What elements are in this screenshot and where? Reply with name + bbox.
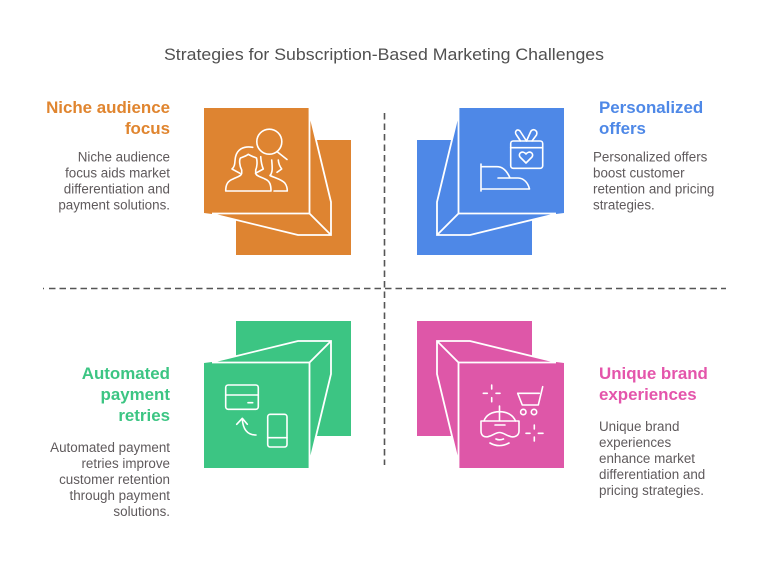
body text: differentiation and xyxy=(599,467,705,482)
body text: pricing strategies. xyxy=(599,483,704,498)
icon: VR headset with cart xyxy=(481,385,543,446)
vertical dashed divider xyxy=(384,113,386,465)
icon: hand with gift xyxy=(481,130,543,191)
panel: automated payment retries xyxy=(50,321,351,519)
heading: offers xyxy=(599,119,646,138)
heading: retries xyxy=(118,406,170,425)
body text: differentiation and xyxy=(64,182,170,196)
panel: niche audience focus xyxy=(46,98,351,255)
graphic: blue fold block xyxy=(417,108,564,255)
title: Strategies for Subscription-Based Marketing Challenges xyxy=(164,45,604,64)
heading: experiences xyxy=(599,385,697,404)
body text: Unique brand xyxy=(599,419,679,434)
heading: payment xyxy=(101,385,170,404)
body text: solutions. xyxy=(113,504,170,519)
body text: customer retention xyxy=(59,472,170,487)
horizontal dashed divider xyxy=(43,288,726,290)
heading: Personalized xyxy=(599,98,703,117)
heading: Niche audience xyxy=(46,98,170,117)
body text: retries improve xyxy=(81,456,170,471)
heading: Automated xyxy=(82,364,170,383)
body text: payment solutions. xyxy=(58,198,170,212)
body text: through payment xyxy=(70,488,170,503)
panel: unique brand experiences xyxy=(417,321,708,498)
heading: Unique brand xyxy=(599,364,708,383)
body text: Personalized offers xyxy=(593,150,708,164)
body text: focus aids market xyxy=(65,166,170,180)
icon: card, arrow and phone xyxy=(226,385,287,447)
graphic: green fold block xyxy=(204,321,351,468)
panel: personalized offers xyxy=(417,98,714,255)
body text: strategies. xyxy=(593,198,655,212)
graphic: orange fold block xyxy=(204,108,351,255)
body text: enhance market xyxy=(599,451,695,466)
body text: Automated payment xyxy=(50,440,170,455)
icon: people with magnifier xyxy=(226,129,287,191)
body text: retention and pricing xyxy=(593,182,714,196)
body text: Niche audience xyxy=(78,150,170,164)
body text: boost customer xyxy=(593,166,685,180)
heading: focus xyxy=(125,119,170,138)
graphic: pink fold block xyxy=(417,321,564,468)
body text: experiences xyxy=(599,435,672,450)
